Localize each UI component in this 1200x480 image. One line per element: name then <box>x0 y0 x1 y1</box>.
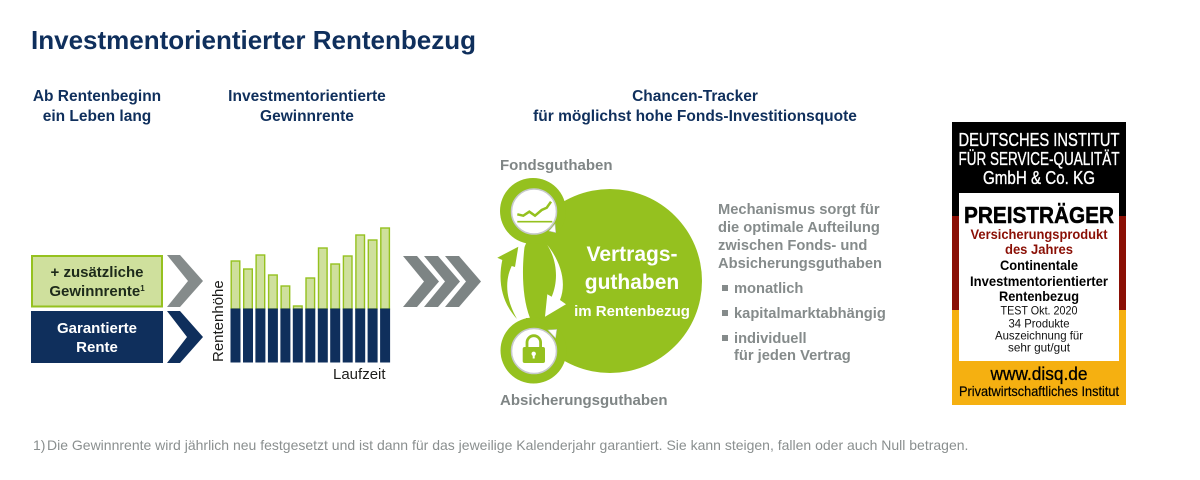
badge footer <box>959 364 1119 399</box>
box: zusätzliche Gewinnrente: 1 <box>140 284 145 293</box>
badge title: PREISTRÄGER <box>964 202 1114 228</box>
badge product: Versicherungsprodukt <box>970 226 1108 242</box>
footnote: 1) <box>33 437 45 453</box>
badge header: GmbH & Co. KG <box>983 168 1095 188</box>
text block: Mechanismus <box>718 202 886 364</box>
bars: Gewinnrente <box>231 228 389 309</box>
badge product: des Jahres <box>1005 241 1073 257</box>
badge details: TEST Okt. 2020 <box>1000 304 1078 318</box>
text block: Mechanismus: Mechanismus sorgt für <box>718 202 880 218</box>
circle text <box>574 243 690 320</box>
badge footer: Privatwirtschaftliches Institut <box>959 383 1119 399</box>
heading: Gewinnrente: Investmentorientierte <box>228 88 386 105</box>
circle text: im Rentenbezug <box>574 303 690 320</box>
badge name: Rentenbezug <box>999 288 1079 304</box>
label: Fondsguthaben: Fondsguthaben <box>500 157 612 174</box>
badge header: DEUTSCHES INSTITUT <box>958 130 1120 150</box>
box: zusätzliche Gewinnrente <box>32 256 162 306</box>
badge name: Investmentorientierter <box>970 273 1109 289</box>
axis label: Laufzeit: Laufzeit <box>333 366 386 383</box>
list: individuell <box>734 331 807 347</box>
heading: Ab Rentenbeginn: ein Leben lang <box>43 108 151 125</box>
badge name <box>970 257 1109 304</box>
text block: Mechanismus: Absicherungsguthaben <box>718 256 882 272</box>
list: kapitalmarktabhängig <box>734 306 886 322</box>
list: für jeden Vertrag <box>734 348 851 364</box>
badge footer: www.disq.de <box>990 364 1088 384</box>
title: Investmentorientierter Rentenbezug <box>31 25 476 55</box>
axis label: Rentenhöhe: Rentenhöhe <box>210 280 227 362</box>
heading: Chancen-Tracker: Chancen-Tracker <box>632 88 758 105</box>
list <box>722 281 886 364</box>
icon: chart <box>500 178 566 244</box>
arrow: triple chevron <box>403 256 481 307</box>
arrow: navy chevron <box>167 311 203 363</box>
text block: Mechanismus: die optimale Aufteilung <box>718 220 880 236</box>
box: Garantierte Rente <box>31 311 163 363</box>
badge header: FÜR SERVICE-QUALITÄT <box>958 149 1120 169</box>
diagram: Vertragsguthaben circle <box>510 189 702 373</box>
list: monatlich <box>734 281 803 297</box>
heading: Gewinnrente: Gewinnrente <box>260 108 354 125</box>
arrow: green cycle arrow <box>497 247 518 319</box>
heading: Chancen-Tracker <box>533 88 857 125</box>
white arc gap on the left <box>510 240 530 318</box>
badge header <box>958 130 1120 188</box>
box: Garantierte Rente: Rente <box>76 339 118 356</box>
footnote: Die Gewinnrente wird jährlich neu festgesetzt und ist dann für das jeweilige Kalenderjahr garantiert. Sie kann steigen, fallen oder auch Null betragen. <box>47 437 968 453</box>
badge details: sehr gut/gut <box>1008 340 1071 354</box>
bar chart <box>210 228 390 383</box>
box: zusätzliche Gewinnrente: Gewinnrente <box>49 283 140 300</box>
badge: DISQ seal <box>952 122 1126 405</box>
badge details <box>995 304 1083 354</box>
badge details: 34 Produkte <box>1008 316 1070 330</box>
label: Absicherungsguthaben: Absicherungsguthaben <box>500 392 668 409</box>
box: zusätzliche Gewinnrente: + zusätzliche <box>51 264 143 281</box>
circle text: guthaben <box>585 271 679 294</box>
badge name: Continentale <box>1000 257 1078 273</box>
badge product <box>970 226 1108 257</box>
box: Garantierte Rente: Garantierte <box>57 320 137 337</box>
heading: Ab Rentenbeginn: Ab Rentenbeginn <box>33 88 161 105</box>
icon: padlock <box>500 318 566 384</box>
text block: Mechanismus: zwischen Fonds- und <box>718 238 867 254</box>
circle text: Vertrags- <box>586 243 678 266</box>
heading: Gewinnrente <box>228 88 386 125</box>
heading: Ab Rentenbeginn <box>33 88 161 125</box>
arrow: white cycle arrow <box>545 245 566 317</box>
badge details: Auszeichnung für <box>995 328 1083 342</box>
bars: garantierte Rente <box>230 308 390 362</box>
arrow: grey chevron <box>167 255 203 307</box>
heading: Chancen-Tracker: für möglichst hohe Fonds-Investitionsquote <box>533 108 857 125</box>
